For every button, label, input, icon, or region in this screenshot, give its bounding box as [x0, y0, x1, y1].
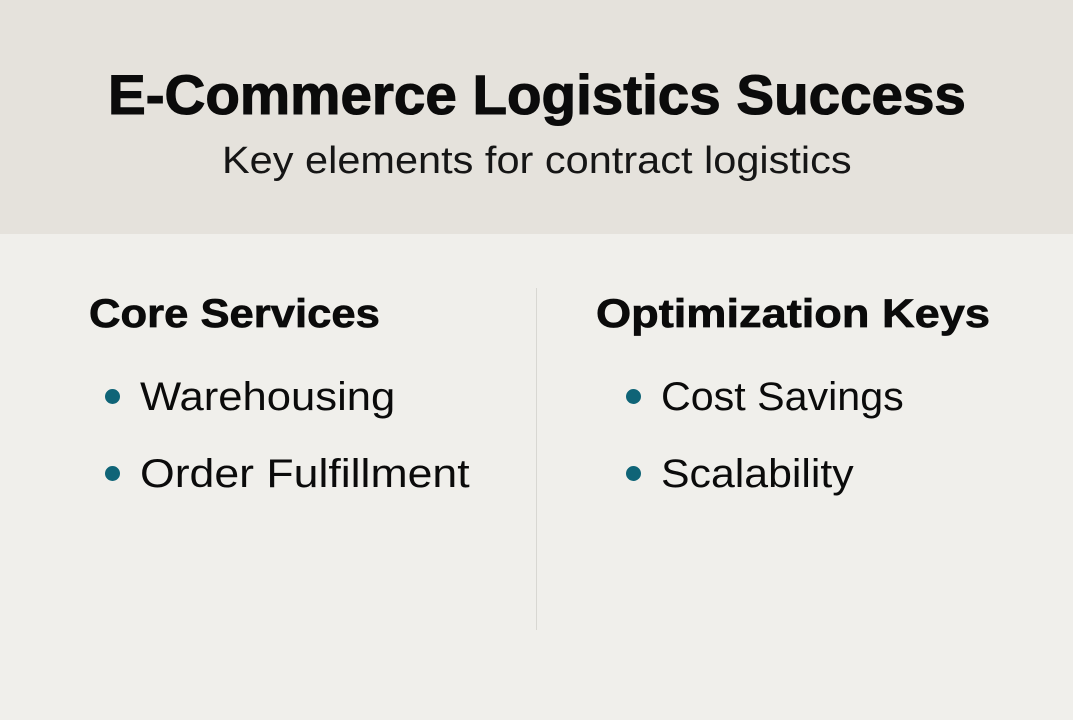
- bullet item: warehousing: Warehousing: [140, 375, 395, 419]
- header band: [0, 0, 1073, 234]
- subtitle: Key elements for contract logistics: [222, 140, 852, 182]
- title: E-Commerce Logistics Success: [108, 63, 966, 126]
- column divider: [536, 288, 537, 630]
- heading: optimization keys: Optimization Keys: [596, 292, 990, 336]
- panel: core services: [89, 292, 470, 496]
- bullet item: cost savings: Cost Savings: [661, 375, 904, 419]
- heading: core services: Core Services: [89, 292, 380, 336]
- bullet item: scalability: Scalability: [661, 452, 854, 496]
- bullet item: order fulfillment: Order Fulfillment: [140, 452, 470, 496]
- panel: optimization keys: [596, 292, 990, 496]
